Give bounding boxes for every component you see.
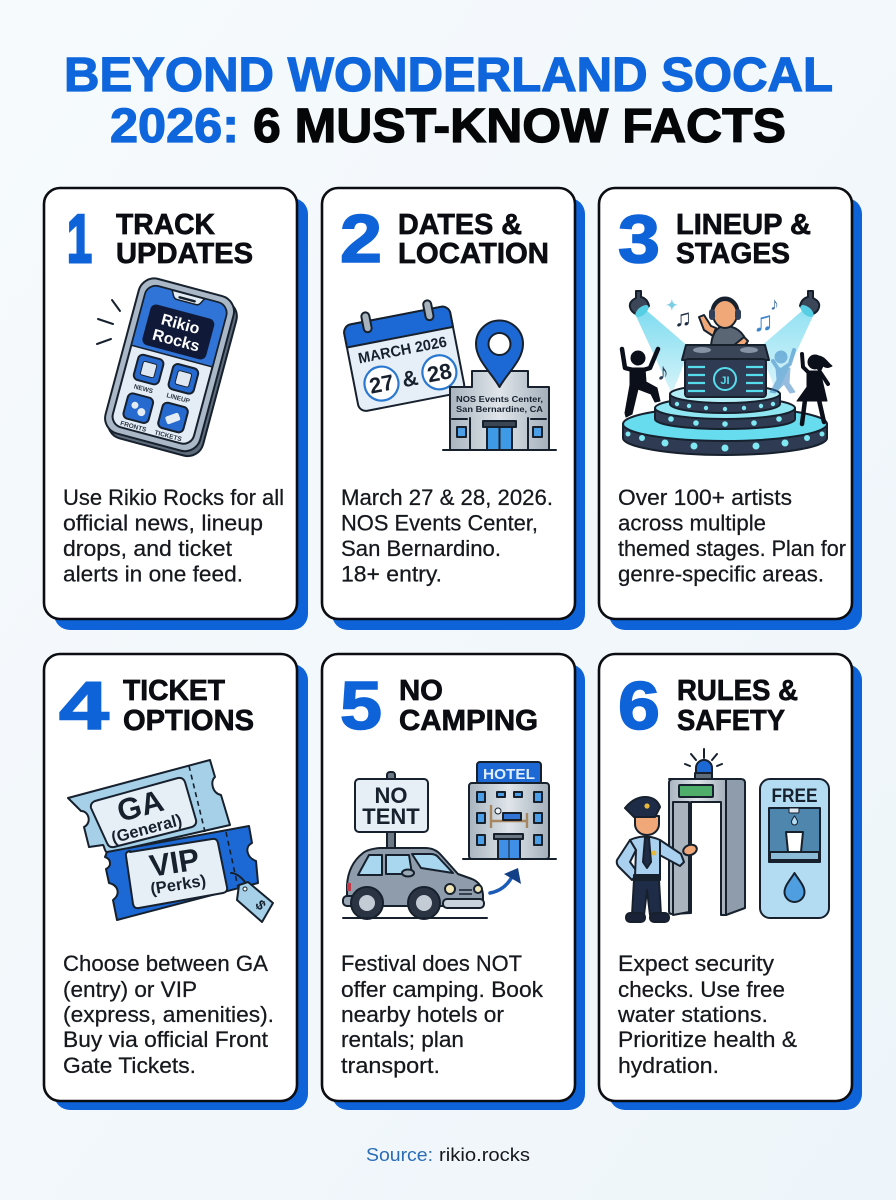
number 2: 2 xyxy=(340,201,382,277)
body text: official news, lineup xyxy=(63,510,263,536)
heading: RULES & xyxy=(677,675,798,707)
panel: lineup and stages xyxy=(599,188,862,630)
icon: VIP ticket xyxy=(105,826,258,920)
icon: free water station: FREE xyxy=(772,786,818,807)
icon: hotel: HOTEL xyxy=(483,766,535,783)
heading: LINEUP & xyxy=(676,209,811,241)
source line xyxy=(366,1144,530,1165)
body text xyxy=(63,951,274,1078)
music notes: ♫ xyxy=(674,305,692,332)
heading: CAMPING xyxy=(399,705,538,737)
number 3: 3 xyxy=(618,201,660,277)
icon: venue building xyxy=(443,371,556,450)
body text: March 27 & 28, 2026. xyxy=(341,485,553,510)
icon: phone with Rikio Rocks app: Rikio xyxy=(159,311,202,338)
body text xyxy=(63,485,284,586)
icon: notification lines xyxy=(97,300,120,344)
icon: VIP ticket: (Perks) xyxy=(149,872,207,898)
title: BEYOND WONDERLAND SOCAL xyxy=(64,49,833,102)
body text: Choose between GA xyxy=(63,951,268,976)
body text: San Bernardino. xyxy=(341,536,501,561)
icon: security gate with siren xyxy=(669,749,745,915)
body text: NOS Events Center, xyxy=(341,510,538,536)
heading: TRACK xyxy=(116,209,215,241)
music notes: ✦ xyxy=(666,297,678,313)
body text: genre-specific areas. xyxy=(618,562,824,586)
spotlight beams xyxy=(636,310,813,394)
music notes: ♪ xyxy=(770,294,779,314)
body text xyxy=(617,951,797,1078)
body text: rentals; plan xyxy=(341,1027,464,1052)
icon: VIP ticket: VIP xyxy=(147,841,202,884)
heading: NO xyxy=(399,675,443,707)
body text xyxy=(341,485,553,586)
panel: track updates xyxy=(44,188,308,630)
body text: nearby hotels or xyxy=(341,1002,504,1027)
body text: Buy via official Front xyxy=(63,1027,268,1052)
body text: offer camping. Book xyxy=(341,977,544,1002)
number 1: 1 xyxy=(67,201,92,277)
heading: STAGES xyxy=(676,238,790,270)
icon: phone with Rikio Rocks app: TICKETS xyxy=(154,429,183,443)
icon: calendar March 2026: MARCH 2026 xyxy=(357,334,448,367)
heading: LOCATION xyxy=(398,238,549,270)
body text: alerts in one feed. xyxy=(63,562,243,586)
heading: OPTIONS xyxy=(123,705,254,737)
title: 6 MUST-KNOW FACTS xyxy=(253,100,786,153)
body text: Over 100+ artists xyxy=(618,485,792,510)
panel: rules and safety xyxy=(599,654,862,1110)
body text: 18+ entry. xyxy=(341,562,442,586)
heading xyxy=(399,675,538,737)
heading xyxy=(116,209,253,270)
number 5: 5 xyxy=(340,668,382,744)
heading xyxy=(398,209,549,270)
body text: across multiple xyxy=(618,510,766,536)
icon: calendar March 2026: 27 xyxy=(367,369,396,399)
dancers xyxy=(622,349,832,424)
panel: no camping xyxy=(322,654,585,1110)
icon: phone with Rikio Rocks app xyxy=(100,275,241,460)
body text: Prioritize health & xyxy=(618,1027,797,1052)
icon: price tag: $ xyxy=(252,897,270,913)
icon: venue building: San Bernardine, CA xyxy=(456,404,543,414)
body text xyxy=(341,951,544,1078)
title: 2026: xyxy=(110,100,239,153)
icon: hotel xyxy=(463,762,556,859)
DJ console xyxy=(682,345,769,397)
panel: ticket options xyxy=(44,654,308,1110)
icon: phone with Rikio Rocks app: FRONTS xyxy=(119,420,148,434)
icon: no tent sign: NO xyxy=(374,783,408,808)
heading xyxy=(677,675,798,737)
music notes: ♪ xyxy=(657,359,669,386)
heading xyxy=(676,209,811,270)
source line: rikio.rocks xyxy=(439,1144,530,1165)
title xyxy=(64,49,833,153)
music notes xyxy=(657,294,779,386)
illustration: DJ on stage xyxy=(622,291,832,455)
DJ xyxy=(699,298,748,352)
heading: DATES & xyxy=(398,209,522,241)
heading: TICKET xyxy=(123,675,225,707)
body text: drops, and ticket xyxy=(63,536,232,561)
heading: UPDATES xyxy=(116,238,253,270)
body text: (entry) or VIP xyxy=(63,977,197,1002)
heading xyxy=(123,675,254,737)
body text: checks. Use free xyxy=(618,977,785,1002)
icon: no tent sign xyxy=(355,772,428,852)
body text: hydration. xyxy=(618,1053,719,1078)
body text: transport. xyxy=(341,1053,440,1078)
body text: themed stages. Plan for xyxy=(618,536,846,561)
icon: phone with Rikio Rocks app: LINEUP xyxy=(166,392,191,405)
spotlights xyxy=(630,291,819,319)
number 4: 4 xyxy=(59,668,109,744)
panel: dates and location xyxy=(322,188,585,630)
icon: price tag xyxy=(231,873,273,922)
body text: water stations. xyxy=(617,1002,768,1027)
music notes: ♫ xyxy=(753,306,774,337)
icon: location pin xyxy=(476,320,523,387)
icon: GA ticket: GA xyxy=(113,783,167,829)
icon: venue building: NOS Events Center, xyxy=(456,394,543,404)
icon: calendar March 2026: 28 xyxy=(425,358,454,387)
number 6: 6 xyxy=(618,668,660,744)
icon: phone with Rikio Rocks app: NEWS xyxy=(133,383,154,395)
heading: SAFETY xyxy=(677,705,785,737)
arrow to hotel xyxy=(490,868,521,893)
body text xyxy=(618,485,846,586)
icon: calendar March 2026: & xyxy=(400,365,420,392)
icon: GA ticket xyxy=(68,760,230,853)
body text: (express, amenities). xyxy=(63,1002,274,1027)
source line: Source: xyxy=(366,1144,433,1165)
stage tiers xyxy=(623,385,827,455)
DJ console: JI xyxy=(720,375,730,387)
icon: no tent sign: TENT xyxy=(362,804,420,829)
body text: Expect security xyxy=(618,951,774,976)
body text: Gate Tickets. xyxy=(63,1053,196,1078)
icon: security officer xyxy=(617,797,698,922)
icon: calendar March 2026 xyxy=(341,296,466,412)
body text: Use Rikio Rocks for all xyxy=(63,485,284,510)
icon: phone with Rikio Rocks app: Rocks xyxy=(150,327,201,356)
body text: Festival does NOT xyxy=(341,951,522,976)
icon: free water station xyxy=(760,779,829,918)
icon: car xyxy=(343,848,487,919)
icon: GA ticket: (General) xyxy=(109,811,184,847)
